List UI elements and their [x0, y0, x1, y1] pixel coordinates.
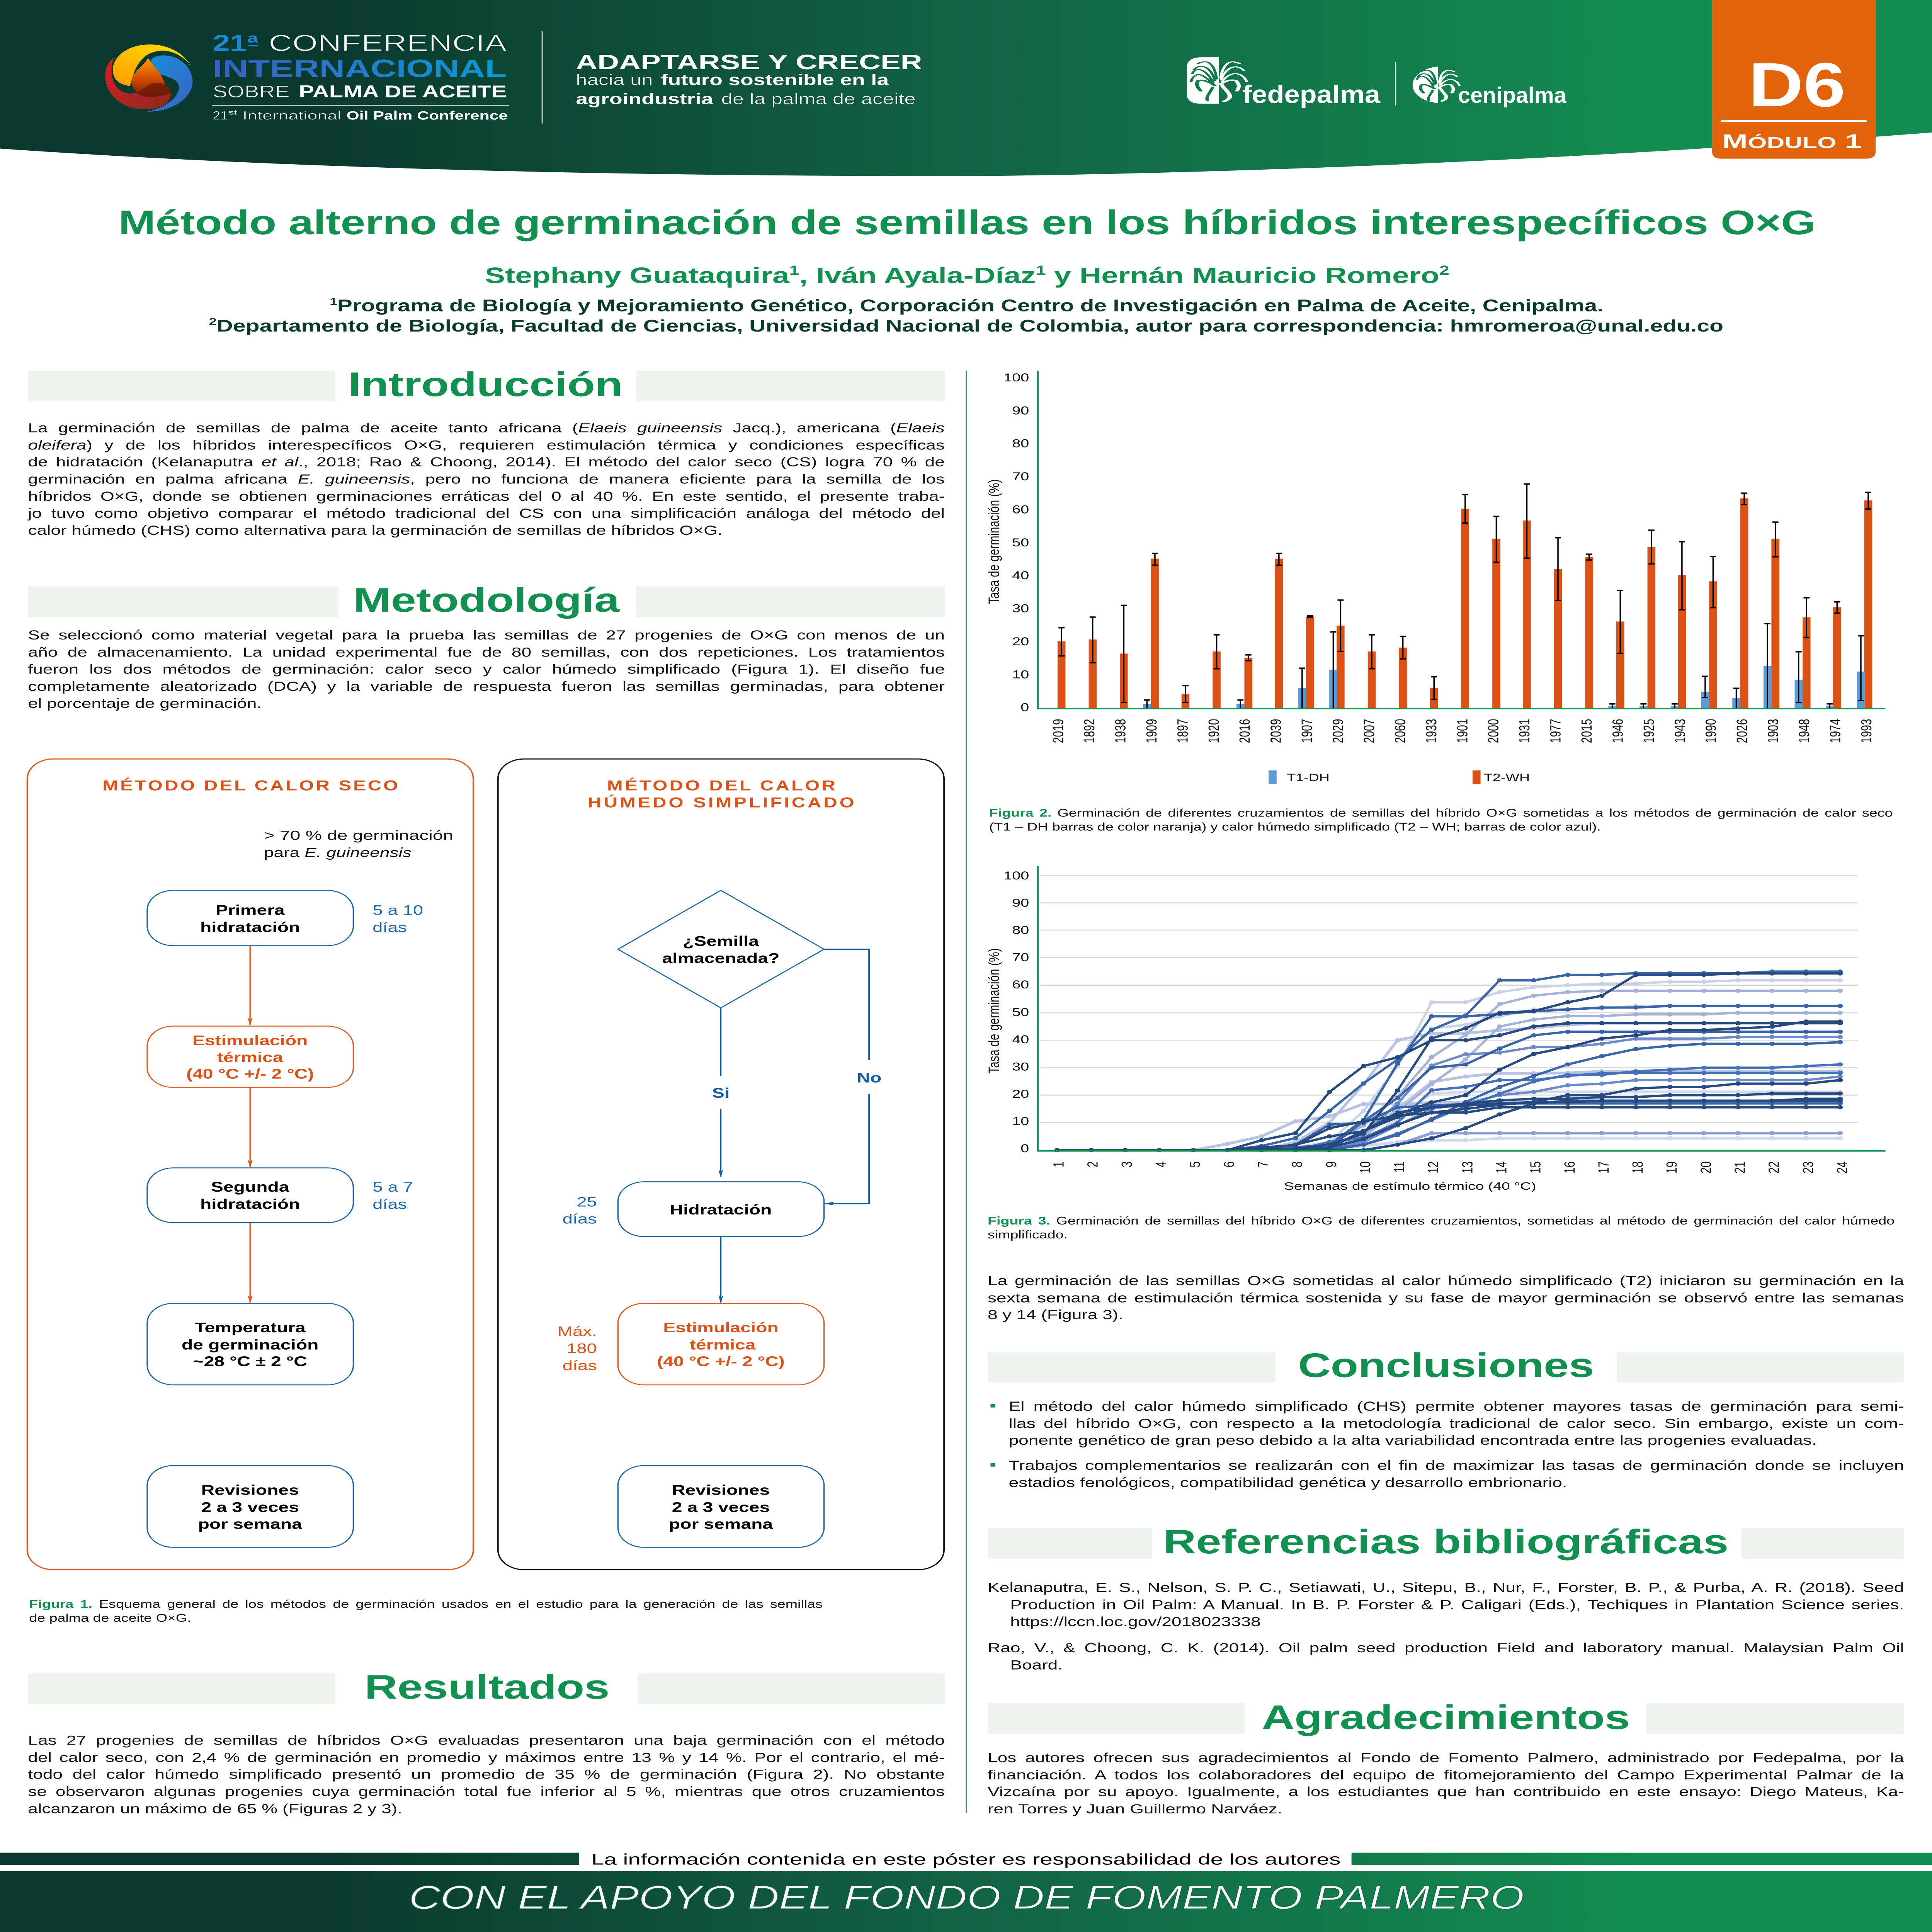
caption: figura 3: [988, 1214, 1895, 1243]
text: methodology: completamente aleatorizado (DCA) y la variable de respuesta fueron las semillas germinadas, para obtener: [28, 679, 945, 694]
bar chart: figura 2: [986, 371, 1886, 784]
x axis labels: 2016: [1237, 719, 1253, 743]
panel heading: MÉTODO DEL CALOR SECO: [102, 778, 398, 794]
text: reference 2: Rao, V., & Choong, C. K. (2014). Oil palm seed production Field and laboratory manual. Malaysian Palm Oil: [988, 1641, 1904, 1655]
x axis labels: 18: [1630, 1162, 1646, 1173]
conference name: CONFERENCIA: [269, 30, 507, 56]
y axis labels: 30: [1012, 1060, 1029, 1073]
authors: Stephany Guataquira: [485, 263, 781, 288]
caption: figura 2: [989, 806, 1893, 835]
caption: figura 2: Figura 2. Germinación de diferentes cruzamientos de semillas del híbrido O×G sometidas a los métodos de germinación de calor seco: [989, 807, 1893, 819]
text: acknowledgements: Los autores ofrecen sus agradecimientos al Fondo de Fomento Palmero, administrado por Fedepalma, por la: [988, 1750, 1904, 1765]
conference name: 21: [213, 30, 247, 56]
step: revisiones: Revisiones: [672, 1482, 770, 1498]
support banner: [0, 1871, 1932, 1932]
x axis labels: 1901: [1454, 719, 1471, 743]
text: conclusion 2: [990, 1457, 1904, 1492]
step: hidratación: [618, 1182, 824, 1236]
text: reference 1: https://lccn.loc.gov/2018023338: [1010, 1614, 1261, 1629]
text: results: Las 27 progenies de semillas de híbridos O×G evaluadas presentaron una baja germinación con el método: [28, 1733, 945, 1748]
panel heading: HÚMEDO SIMPLIFICADO: [588, 795, 854, 811]
text: results continuation: La germinación de las semillas O×G sometidas al calor húmedo simplificado (T2) iniciaron su germinación en la: [988, 1273, 1904, 1288]
text: acknowledgements: Vizcaína por su apoyo. Igualmente, a los estudiantes que han contribuido en este ensayo: Diego Mateus, Ka-: [988, 1785, 1904, 1799]
authors: 1: [1036, 263, 1046, 278]
duration: 5 a 7 días: días: [372, 1196, 407, 1212]
conference name: a: [247, 31, 259, 46]
step: estimulación térmica: Estimulación: [663, 1320, 779, 1335]
text: methodology: el porcentaje de germinación.: [28, 696, 262, 711]
text: conclusion 2: Trabajos complementarios se realizarán con el fin de maximizar las tasas de germinación donde se incluyen: [1009, 1458, 1904, 1473]
text: results continuation: sexta semana de estimulación térmica sostenida y su fase de mayor germinación se observó entre las semanas: [988, 1291, 1904, 1305]
axes: [1038, 371, 1886, 709]
conference name: [212, 30, 509, 122]
step: hidratación: Hidratación: [670, 1202, 772, 1218]
y axis title: Tasa de germinación (%): [986, 948, 1002, 1073]
y axis labels: 0: [1020, 701, 1029, 714]
x axis labels: 3: [1119, 1162, 1135, 1167]
x axis labels: [1051, 1162, 1850, 1173]
x axis labels: 12: [1425, 1162, 1442, 1173]
arrow: [248, 1223, 252, 1303]
arrow: Si branch: Si: [712, 1085, 730, 1101]
logo: fedepalma: fedepalma: [1242, 81, 1381, 109]
x axis labels: 24: [1834, 1162, 1850, 1173]
y axis labels: 70: [1012, 951, 1029, 964]
x axis labels: 1990: [1703, 719, 1719, 743]
heading: Metodología: [28, 581, 945, 619]
legend: T1-DH: [1287, 772, 1330, 784]
heading: Conclusiones: [988, 1347, 1904, 1384]
x axis labels: 16: [1562, 1162, 1578, 1173]
x axis labels: 1948: [1796, 719, 1813, 743]
text: acknowledgements: [988, 1749, 1904, 1818]
support banner: CON EL APOYO DEL FONDO DE FOMENTO PALMERO: [409, 1879, 1524, 1916]
conference slogan: [576, 51, 922, 107]
y axis labels: 70: [1012, 470, 1029, 483]
duration: máx. 180 días: Máx.: [558, 1323, 597, 1339]
error bars: [1058, 484, 1871, 709]
legend: T2-WH: [1484, 772, 1530, 784]
duration: 5 a 10 días: días: [372, 920, 407, 935]
text: results continuation: 8 y 14 (Figura 3).: [988, 1308, 1123, 1322]
bars T1-DH: [1143, 666, 1865, 709]
y axis labels: [1003, 371, 1029, 714]
line chart: figura 3: [986, 866, 1886, 1192]
conference slogan: futuro sostenible en la: [661, 71, 889, 88]
step: primera hidratación: hidratación: [200, 920, 300, 935]
step: revisiones: [618, 1466, 824, 1548]
x axis labels: 1892: [1082, 719, 1098, 743]
heading: Metodología: Metodología: [353, 581, 620, 619]
conference name: SOBRE: [213, 82, 290, 101]
x axis labels: 15: [1528, 1162, 1544, 1173]
x axis labels: 2015: [1579, 719, 1595, 743]
heading: Introducción: [28, 366, 945, 404]
text: reference 1: Kelanaputra, E. S., Nelson, S. P. C., Setiawati, U., Sitepu, B., Nur, F., Forster, B. P., & Purba, A. R. (2018). Seed: [988, 1580, 1904, 1595]
y axis labels: 90: [1012, 404, 1029, 417]
bars T2-WH: [1058, 498, 1872, 709]
step: revisiones: 2 a 3 veces: [672, 1500, 770, 1515]
authors: 2: [1439, 263, 1449, 278]
x axis labels: 1993: [1859, 719, 1875, 743]
y axis labels: 10: [1012, 668, 1029, 681]
duration: 25 días: [563, 1194, 597, 1226]
conference slogan: hacia un: [576, 71, 653, 88]
x axis labels: 19: [1664, 1162, 1680, 1173]
note on germination: [264, 828, 453, 860]
duration: 5 a 7 días: [372, 1179, 413, 1212]
text: methodology: Se seleccionó como material vegetal para la prueba las semillas de 27 progenies de O×G con menos de un: [28, 628, 945, 643]
y axis labels: 100: [1003, 371, 1029, 384]
caption: figura 3: simplificado.: [988, 1229, 1068, 1241]
text: methodology: [28, 627, 945, 713]
duration: máx. 180 días: 180: [566, 1340, 597, 1356]
title: Método alterno de germinación de semillas en los híbridos interespecíficos O×G: [119, 204, 1816, 242]
header banner: [0, 0, 1932, 176]
conference slogan: de la palma de aceite: [721, 90, 916, 107]
y axis labels: 60: [1012, 503, 1029, 516]
x axis labels: 13: [1460, 1162, 1476, 1173]
duration: máx. 180 días: días: [563, 1358, 597, 1373]
arrow: No branch: No: [857, 1070, 881, 1085]
x axis labels: 2026: [1734, 719, 1750, 743]
x axis labels: 2060: [1393, 719, 1408, 743]
y axis labels: 50: [1012, 1006, 1029, 1019]
step: estimulación térmica: (40 °C +/- 2 °C): [186, 1066, 314, 1082]
step: segunda hidratación: Segunda: [211, 1179, 289, 1194]
x axis labels: 7: [1255, 1162, 1272, 1167]
x axis labels: 1974: [1828, 719, 1844, 743]
x axis labels: 1907: [1299, 719, 1315, 743]
x axis labels: 9: [1323, 1162, 1340, 1167]
text: results: todo del calor húmedo simplificado presentó un promedio de 35 % de germinación (Figura 2). No obstante: [28, 1767, 945, 1782]
heading: Introducción: Introducción: [348, 366, 622, 404]
duration: 5 a 7 días: 5 a 7: [372, 1179, 413, 1194]
text: introduction: oleifera) y de los híbridos interespecíficos O×G, requieren estimulación térmica y condiciones específicas: [28, 438, 945, 452]
note on germination: para E. guineensis: [264, 845, 412, 860]
x axis labels: [1051, 719, 1875, 743]
x axis labels: 1: [1051, 1162, 1067, 1167]
x axis labels: 1943: [1672, 719, 1688, 743]
duration: 25 días: 25: [577, 1194, 597, 1209]
text: introduction: híbridos O×G, donde se obtienen germinaciones erráticas del 0 al 40 %. En este sentido, el presente traba-: [28, 489, 945, 504]
affiliations: Programa de Biología y Mejoramiento Genético, Corporación Centro de Investigación en Palma de Aceite, Cenipalma.: [337, 296, 1604, 315]
text: acknowledgements: ren Torres y Juan Guillermo Narváez.: [988, 1802, 1282, 1816]
duration: 5 a 10 días: 5 a 10: [372, 902, 423, 918]
y axis labels: 100: [1003, 869, 1029, 882]
x axis labels: 6: [1221, 1162, 1237, 1167]
text: introduction: [28, 420, 945, 539]
caption: figura 2: (T1 – DH barras de color naranja) y calor húmedo simplificado (T2 – WH; barras de color azul).: [989, 821, 1601, 833]
x axis labels: 2019: [1051, 719, 1067, 743]
text: results: [28, 1732, 945, 1818]
x axis labels: 21: [1732, 1162, 1748, 1173]
step: segunda hidratación: [147, 1168, 353, 1223]
duration: máx. 180 días: [558, 1323, 597, 1373]
text: introduction: germinación en palma africana E. guineensis, pero no funciona de manera eficiente para la semilla de los: [28, 472, 945, 486]
y axis title: Tasa de germinación (%): [986, 479, 1002, 604]
x axis labels: 22: [1766, 1162, 1782, 1173]
authors: , Iván Ayala-Díaz: [799, 263, 1036, 288]
y axis labels: 80: [1012, 437, 1029, 450]
step: primera hidratación: Primera: [216, 902, 285, 918]
affiliations: 2: [209, 316, 216, 327]
y axis labels: 60: [1012, 978, 1029, 991]
heading: Agradecimientos: [988, 1698, 1904, 1736]
arrow: Si branch: [712, 1008, 730, 1177]
footer: [0, 1851, 1932, 1932]
text: results: del calor seco, con 2,4 % de germinación en promedio y máximos entre 13 % y 14 %. Por el contrario, el mé-: [28, 1750, 945, 1765]
step: temperatura de germinación: de germinación: [182, 1337, 318, 1352]
panel heading: MÉTODO DEL CALOR: [607, 778, 835, 794]
authors: 1: [789, 263, 799, 278]
y axis labels: 90: [1012, 896, 1029, 909]
affiliations: 1: [330, 296, 337, 307]
step: estimulación térmica: [147, 1026, 353, 1087]
arrow: [248, 1087, 252, 1167]
x axis labels: 5: [1187, 1162, 1203, 1167]
x axis labels: 2: [1085, 1162, 1101, 1167]
x axis title: Semanas de estímulo térmico (40 °C): [1284, 1180, 1536, 1192]
heading: Referencias bibliográficas: Referencias bibliográficas: [1163, 1523, 1728, 1561]
x axis labels: 23: [1800, 1162, 1816, 1173]
panel: método del calor seco: [27, 759, 473, 1570]
conference slogan: agroindustria: [576, 90, 714, 107]
logo: fedepalma: [1187, 57, 1381, 109]
x axis labels: 2007: [1361, 719, 1378, 743]
arrow: No branch: [824, 949, 881, 1205]
duration: 5 a 10 días: [372, 902, 423, 935]
x axis labels: 1938: [1113, 719, 1129, 743]
responsibility notice: La información contenida en este póster es responsabilidad de los autores: [592, 1851, 1340, 1868]
x axis labels: 4: [1153, 1162, 1169, 1167]
affiliations: Departamento de Biología, Facultad de Ciencias, Universidad Nacional de Colombia, autor para correspondencia: hmromeroa@unal.edu.co: [216, 316, 1723, 335]
logo: cenipalma: cenipalma: [1458, 83, 1567, 108]
step: estimulación térmica: [618, 1303, 824, 1385]
heading: Resultados: Resultados: [365, 1668, 610, 1706]
x axis labels: 20: [1698, 1162, 1714, 1173]
note on germination: > 70 % de germinación: [264, 828, 453, 843]
x axis labels: 1903: [1765, 719, 1782, 743]
text: conclusion 2: estadios fenológicos, compatibilidad genética y desarrollo embrionario.: [1009, 1475, 1567, 1490]
caption: figura 1: de palma de aceite O×G.: [29, 1612, 191, 1624]
step: primera hidratación: [147, 890, 353, 946]
decision: semilla almacenada: ¿Semilla: [683, 934, 759, 949]
x axis labels: 17: [1596, 1162, 1612, 1173]
x axis labels: 1897: [1175, 719, 1191, 743]
legend: [1269, 770, 1530, 784]
text: results: se observaron algunas progenies cuya germinación total fue inferior al 5 %, mientras que otros cruzamientos: [28, 1784, 945, 1799]
text: reference 1: [988, 1579, 1904, 1631]
decision: semilla almacenada: [618, 890, 824, 1008]
y axis labels: 20: [1012, 635, 1029, 648]
x axis labels: 1909: [1144, 719, 1160, 743]
x axis labels: 10: [1357, 1162, 1374, 1173]
x axis labels: 1933: [1423, 719, 1440, 743]
decision: semilla almacenada: almacenada?: [662, 951, 779, 966]
text: introduction: jo tuvo como objetivo comparar el método tradicional del CS con una simplificación análoga del método del: [28, 506, 945, 521]
heading: Conclusiones: Conclusiones: [1298, 1347, 1594, 1384]
conference name: PALMA DE ACEITE: [299, 82, 507, 101]
heading: Agradecimientos: Agradecimientos: [1262, 1698, 1630, 1736]
y axis labels: 30: [1012, 602, 1029, 615]
conference name: st: [228, 109, 237, 116]
step: temperatura de germinación: ~28 °C ± 2 °C: [193, 1354, 307, 1369]
text: introduction: La germinación de semillas de palma de aceite tanto africana (Elaeis guineensis Jacq.), americana (Elaeis: [28, 421, 945, 435]
x axis labels: 11: [1391, 1162, 1408, 1173]
caption: figura 3: Figura 3. Germinación de semillas del híbrido O×G de diferentes cruzamientos, sometidas al método de germinación del calor húmedo: [988, 1215, 1895, 1227]
step: revisiones: Revisiones: [201, 1482, 299, 1498]
step: revisiones: [147, 1466, 353, 1548]
arrow: [719, 1236, 723, 1303]
text: results: alcanzaron un máximo de 65 % (Figuras 2 y 3).: [28, 1801, 402, 1816]
step: revisiones: por semana: [669, 1516, 773, 1532]
conference name: 21: [213, 109, 228, 122]
responsibility notice: [0, 1851, 1932, 1868]
step: revisiones: 2 a 3 veces: [201, 1500, 299, 1515]
x axis labels: 14: [1494, 1162, 1510, 1173]
step: estimulación térmica: (40 °C +/- 2 °C): [657, 1354, 785, 1369]
text: introduction: de hidratación (Kelanaputra et al., 2018; Rao & Choong, 2014). El método del calor seco (CS) logra 70 % de: [28, 455, 945, 469]
text: conclusion 1: llas del híbrido O×G, con respecto a la metodología tradicional de calor seco. Sin embargo, existe un com-: [1009, 1416, 1904, 1431]
text: methodology: año de almacenamiento. La unidad experimental fue de 80 semillas, con dos repeticiones. Los tratamientos: [28, 645, 945, 660]
germination series lines: [1057, 971, 1840, 1150]
step: estimulación térmica: térmica: [217, 1049, 283, 1065]
text: introduction: calor húmedo (CHS) como alternativa para la germinación de semillas de híbridos O×G.: [28, 523, 723, 538]
y axis labels: [1003, 869, 1029, 1155]
y axis labels: 0: [1020, 1142, 1029, 1155]
step: estimulación térmica: térmica: [690, 1337, 756, 1352]
x axis labels: 8: [1289, 1162, 1306, 1167]
x axis labels: 2039: [1268, 719, 1284, 743]
panel heading: [588, 778, 854, 811]
icon: conference swirl logo: [105, 44, 193, 112]
step: segunda hidratación: hidratación: [200, 1196, 300, 1212]
conference name: Oil Palm Conference: [347, 109, 508, 122]
step: revisiones: por semana: [198, 1516, 302, 1532]
affiliations: [209, 296, 1723, 335]
panel: método del calor húmedo simplificado: [498, 759, 944, 1570]
y axis labels: 40: [1012, 569, 1029, 582]
text: reference 2: Board.: [1010, 1658, 1063, 1672]
axes: [1038, 866, 1886, 1151]
logo: cenipalma: [1413, 66, 1567, 108]
module tab D6: MÓDULO 1: [1722, 130, 1862, 152]
x axis labels: 2000: [1486, 719, 1502, 743]
y axis labels: 40: [1012, 1033, 1029, 1046]
text: conclusion 1: ponente genético de gran peso debido a la alta variabilidad encontrada entre las progenies evaluadas.: [1009, 1433, 1817, 1448]
step: temperatura de germinación: [147, 1303, 353, 1385]
text: reference 2: [988, 1639, 1904, 1674]
y axis labels: 20: [1012, 1088, 1029, 1100]
text: conclusion 1: El método del calor húmedo simplificado (CHS) permite obtener mayores tasas de germinación para semi-: [1009, 1399, 1904, 1414]
y axis labels: 80: [1012, 924, 1029, 937]
module tab D6: D6: [1748, 50, 1845, 120]
x axis labels: 1931: [1517, 719, 1533, 743]
text: acknowledgements: financiación. A todos los colaboradores del equipo de fitomejoramiento del Campo Experimental Palmar de la: [988, 1767, 1904, 1782]
text: results continuation: [988, 1272, 1904, 1324]
heading: Resultados: [28, 1668, 945, 1706]
title and authors: [119, 204, 1816, 335]
y axis labels: 50: [1012, 536, 1029, 549]
x axis labels: 1925: [1641, 719, 1657, 743]
duration: 25 días: días: [563, 1211, 597, 1226]
y axis labels: 10: [1012, 1115, 1029, 1128]
module tab D6: [1712, 0, 1876, 159]
arrow: [248, 946, 252, 1025]
x axis labels: 1920: [1206, 719, 1222, 743]
caption: figura 1: Figura 1. Esquema general de los métodos de germinación usados en el estudio para la generación de las semillas: [29, 1598, 823, 1610]
green curved background: [0, 0, 1932, 176]
x axis labels: 1946: [1610, 719, 1626, 743]
authors: y Hernán Mauricio Romero: [1046, 263, 1439, 288]
step: estimulación térmica: Estimulación: [192, 1033, 308, 1048]
heading: Referencias bibliográficas: [988, 1523, 1904, 1561]
text: methodology: fueron los dos métodos de germinación: calor seco y calor húmedo simplificado (Figura 1). El diseño fue: [28, 662, 945, 677]
conference name: INTERNACIONAL: [213, 55, 507, 83]
x axis labels: 1977: [1548, 719, 1564, 743]
text: reference 1: Production in Oil Palm: A Manual. In B. P. Forster & P. Caligari (Eds.), Techiques in Plantation Science series.: [1010, 1597, 1904, 1612]
caption: figura 1: [29, 1597, 823, 1626]
text: conclusion 1: [990, 1398, 1904, 1450]
conference name: International: [242, 109, 341, 122]
step: temperatura de germinación: Temperatura: [195, 1320, 306, 1335]
conference slogan: ADAPTARSE Y CRECER: [576, 51, 922, 74]
x axis labels: 2029: [1330, 719, 1347, 743]
